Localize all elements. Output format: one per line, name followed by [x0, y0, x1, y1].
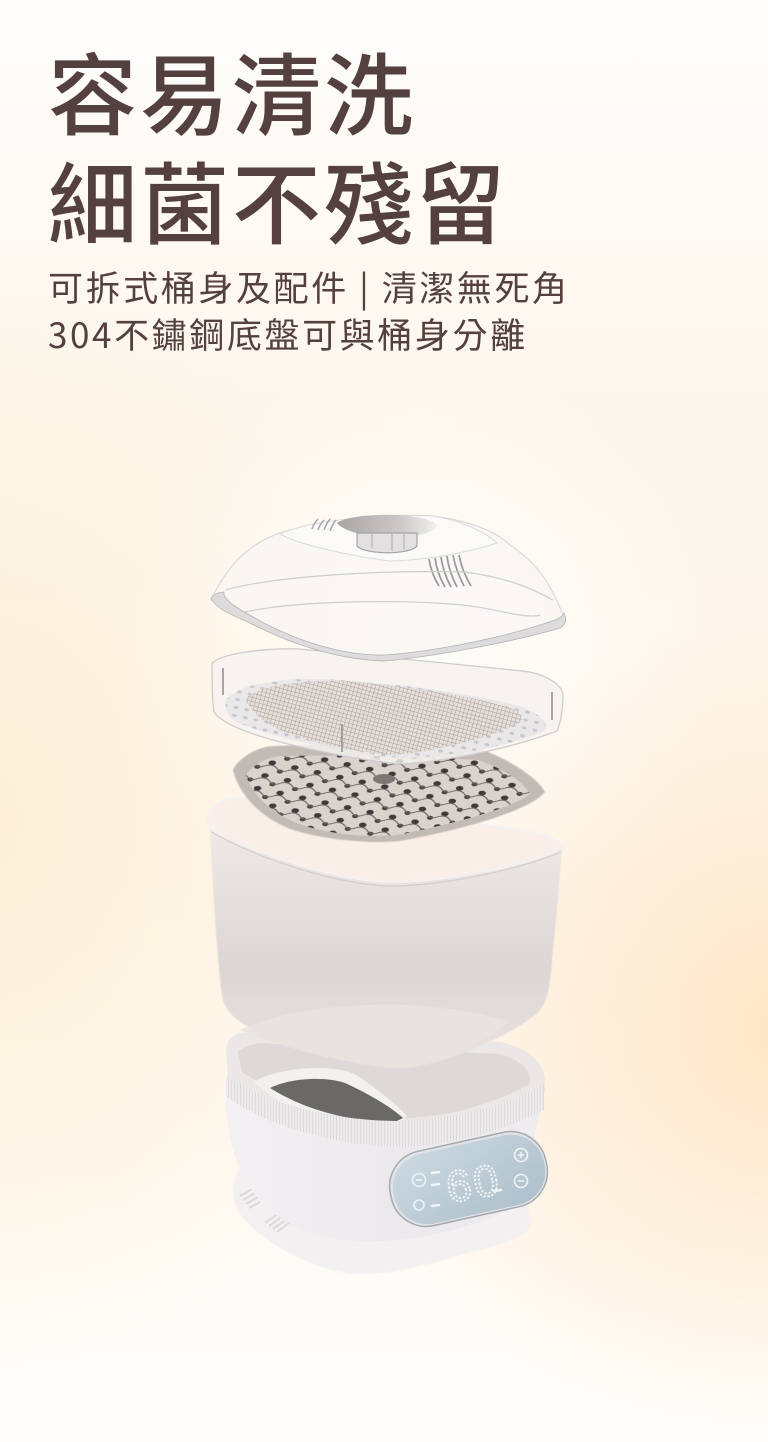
tray body — [212, 649, 563, 764]
rim lower line — [212, 832, 561, 886]
title: 細菌不殘留 — [48, 134, 508, 262]
title: 容易清洗 — [48, 24, 416, 154]
bucket rim — [208, 798, 562, 882]
knob collar — [372, 534, 404, 551]
dark heating plate — [270, 1079, 403, 1122]
base unit — [226, 1033, 554, 1274]
water tank opening — [254, 1068, 407, 1122]
control panel — [383, 1125, 554, 1233]
lid inner line — [225, 572, 553, 616]
display reading: 60 — [443, 1155, 505, 1213]
plate edge — [233, 745, 545, 842]
panel icons — [412, 1148, 528, 1210]
steel mesh — [246, 681, 522, 755]
dome — [211, 515, 565, 660]
transparent lid — [211, 515, 566, 661]
subtitle: 304不鏽鋼底盤可與桶身分離 — [48, 308, 528, 358]
colon and dash marks — [432, 1172, 501, 1206]
transparent tray — [212, 649, 563, 764]
vents front — [429, 555, 471, 587]
steel plate — [233, 745, 545, 842]
knob — [357, 533, 417, 553]
ribbed band — [226, 1076, 544, 1147]
panel bezel — [383, 1125, 554, 1233]
plate perforations — [246, 756, 530, 836]
subtitle — [48, 261, 570, 358]
lid rim — [211, 592, 566, 661]
panel glass — [386, 1128, 552, 1231]
top panel — [280, 516, 497, 561]
vents rear — [312, 519, 336, 531]
plate centre knob — [373, 774, 395, 784]
inner basin — [226, 1033, 545, 1125]
steam filter disc — [337, 515, 437, 537]
bucket — [208, 798, 562, 1068]
tray posts — [223, 668, 552, 752]
bucket lower bowl highlight — [240, 1005, 510, 1067]
base body — [226, 1076, 544, 1241]
subtitle: 可拆式桶身及配件 | 清潔無死角 — [48, 261, 570, 312]
title — [48, 24, 508, 262]
foot vents — [240, 1188, 289, 1232]
bucket outer wall — [209, 818, 562, 1068]
tray floor — [225, 679, 546, 758]
base foot — [233, 1168, 531, 1274]
